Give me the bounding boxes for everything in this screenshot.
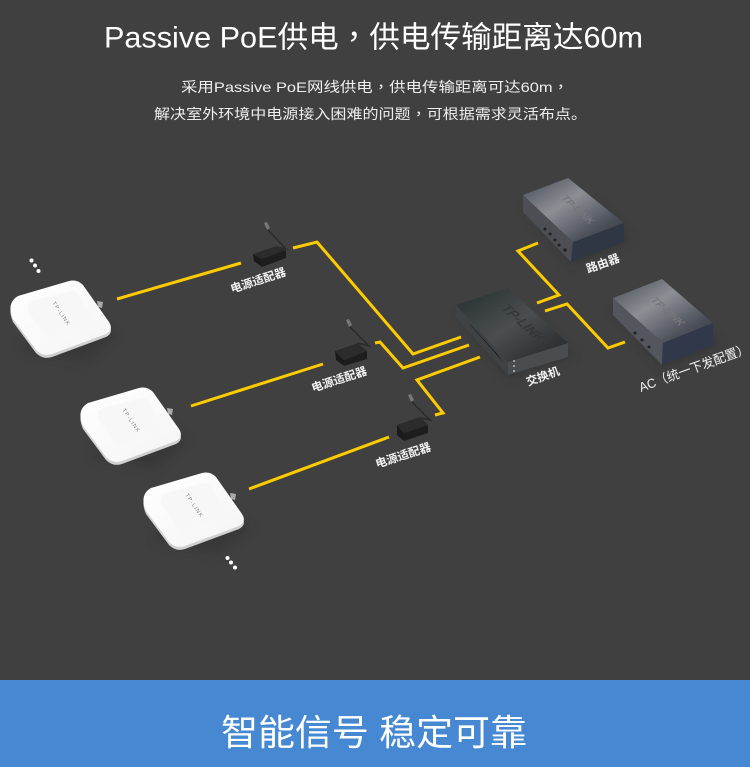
title: Passive PoE供电，供电传输距离达60m <box>104 12 643 56</box>
switch device <box>456 288 575 378</box>
banner heading: 智能信号 稳定可靠 <box>221 712 527 753</box>
access point 1 <box>10 280 118 362</box>
bottom banner <box>0 680 750 767</box>
access point 3: TP-LINK <box>183 493 204 519</box>
yellow connection cables <box>117 242 625 489</box>
label: power adapter 3: 电源适配器 <box>374 440 433 471</box>
ellipsis dots top <box>30 258 40 273</box>
access point 3 <box>143 472 251 554</box>
subtitle text <box>154 77 587 124</box>
AC controller device <box>613 279 720 368</box>
label: power adapter 2: 电源适配器 <box>310 364 369 395</box>
ellipsis dots bottom <box>226 556 237 570</box>
access point 2 <box>80 388 188 469</box>
access point 1: TP-LINK <box>50 301 71 327</box>
switch device: TP-LINK <box>497 303 550 344</box>
label: switch: 交换机 <box>524 364 562 389</box>
power adapter 2 <box>335 319 369 366</box>
AC controller device: TP-LINK <box>647 297 687 328</box>
access point 2: TP-LINK <box>120 408 141 434</box>
subtitle text: 解决室外环境中电源接入困难的问题 ，可根据需求灵活布点。 <box>154 104 587 124</box>
router device: TP-LINK <box>557 195 597 226</box>
router device <box>523 178 630 265</box>
power adapter 1 <box>253 222 286 267</box>
subtitle text: 采用Passive PoE网线供电 ，供电传输距离可达60m ， <box>181 77 569 97</box>
power adapter 3 <box>397 394 430 441</box>
label: power adapter 1: 电源适配器 <box>229 265 288 296</box>
label: router: 路由器 <box>584 251 622 276</box>
